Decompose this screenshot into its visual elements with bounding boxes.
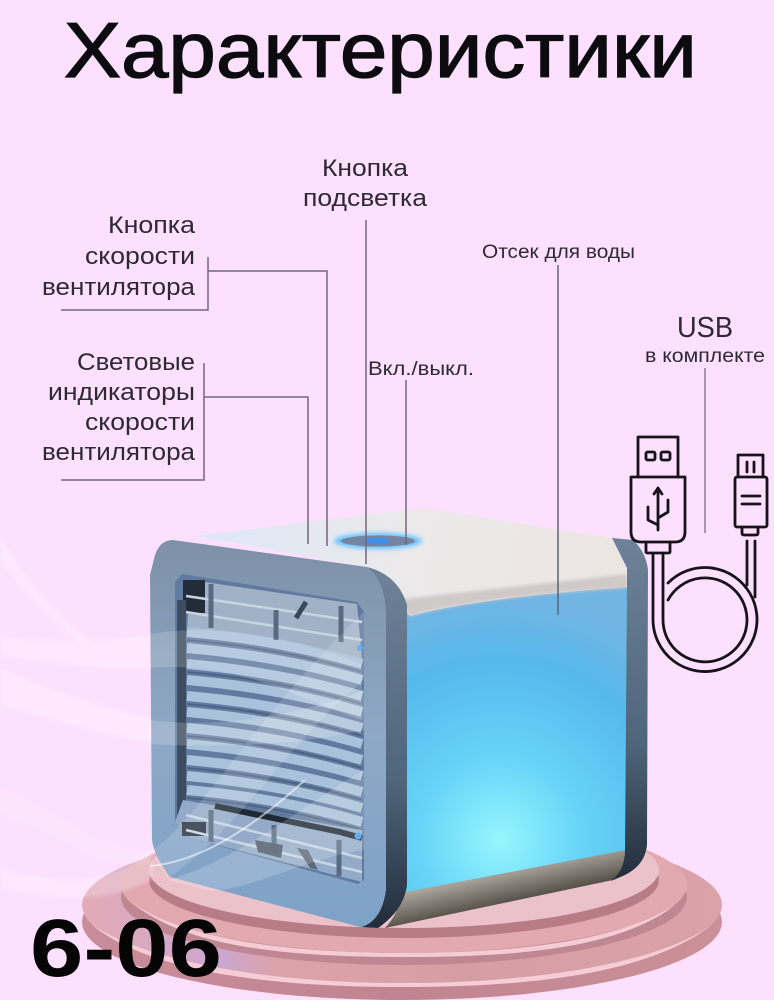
label: usb (645, 312, 765, 533)
label: fan speed button (42, 212, 327, 546)
front frame (150, 540, 388, 928)
label: light button: подсветка (303, 185, 427, 212)
label: fan speed button: скорости (85, 243, 195, 270)
label: fan speed button: Кнопка (108, 212, 195, 239)
title: Характеристики (64, 6, 697, 94)
price: 6-06 (30, 903, 222, 994)
label: power: Вкл./выкл. (368, 358, 474, 380)
label: light button (303, 155, 427, 564)
blue leds (357, 645, 363, 651)
upper grille bars (186, 596, 362, 640)
label: usb: в комплекте (645, 345, 765, 367)
air cooler cube (150, 508, 648, 928)
right dark post (611, 538, 648, 881)
icon: usb cable (631, 437, 767, 672)
lower grille (175, 800, 362, 882)
front dark post (362, 567, 407, 928)
label: fan speed indicators: индикаторы (48, 379, 195, 406)
label: fan speed indicators: скорости (85, 409, 195, 436)
white band lip (395, 574, 627, 616)
top face and white band (195, 508, 627, 616)
label: light button: Кнопка (322, 155, 408, 182)
label: fan speed button: вентилятора (42, 274, 195, 301)
water tank panel (405, 582, 630, 895)
grille (175, 574, 364, 884)
wind over cube (150, 612, 364, 890)
label: fan speed indicators: Световые (77, 349, 195, 376)
label: usb: USB (677, 312, 733, 344)
touch button ring (334, 533, 422, 549)
label: fan speed indicators: вентилятора (42, 439, 195, 466)
wind behind cube (0, 535, 185, 898)
grille slats (187, 632, 362, 822)
label: fan speed indicators (42, 349, 308, 544)
label: water tank: Отсек для воды (482, 241, 635, 263)
bottom band (385, 850, 626, 928)
platform (82, 812, 722, 1000)
